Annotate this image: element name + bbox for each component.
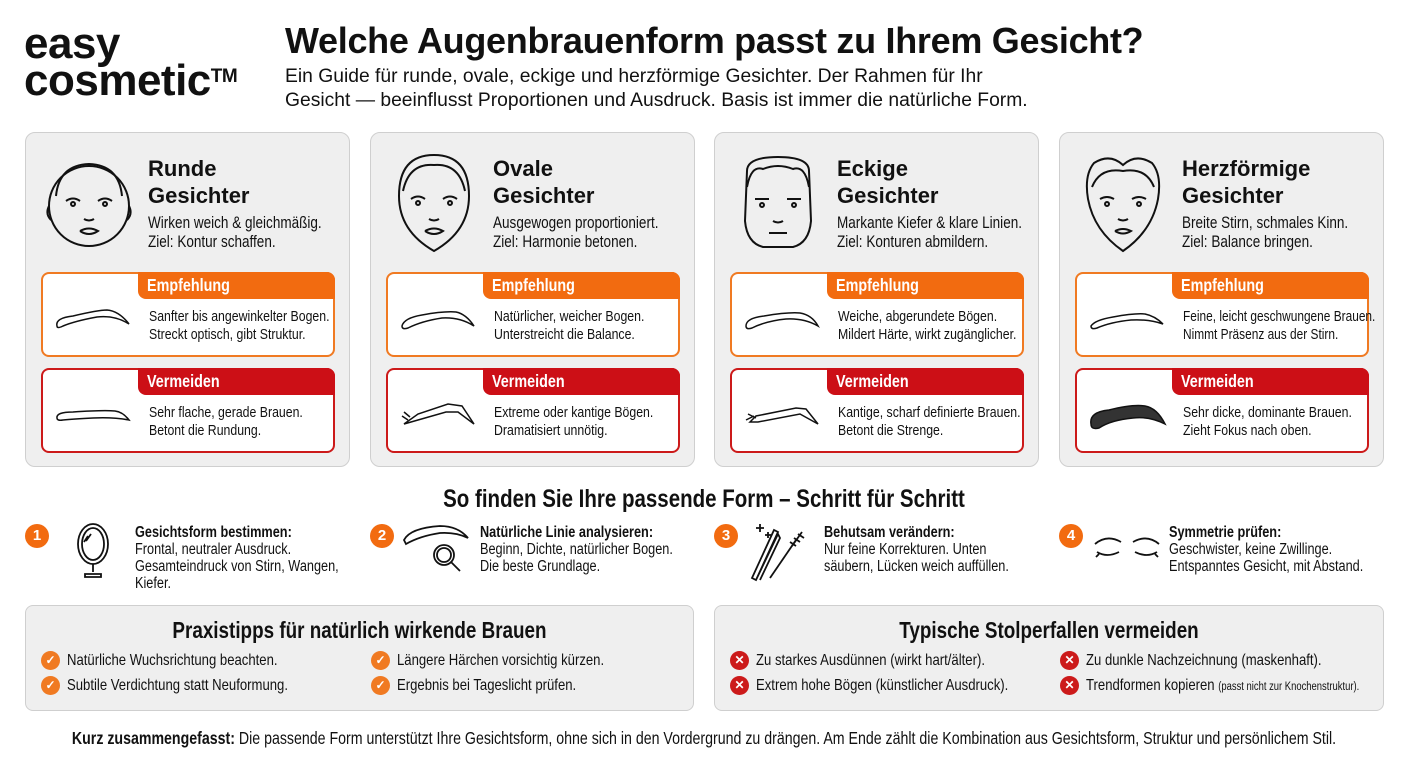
avoid: Vermeiden (147, 371, 220, 391)
heading: Gesichter (1182, 183, 1284, 208)
panel: Praxistipps: Praxistipps für natürlich wirkende Brauen (172, 617, 547, 643)
subtitle (285, 66, 1028, 111)
heading: Runde (148, 156, 216, 181)
panel: Praxistipps: ✓ (375, 653, 386, 667)
recommendation: Empfehlung (836, 275, 919, 295)
icon: brow with magnifier (403, 525, 469, 572)
panel: Ovale Gesichter (370, 132, 695, 467)
step 1: 1 (33, 527, 41, 544)
avoid: Betont die Strenge. (838, 422, 943, 439)
recommendation (1075, 272, 1369, 357)
heading (1182, 156, 1310, 208)
logo: cosmeticTM (24, 56, 237, 105)
step 1: Gesichtsform bestimmen: (135, 524, 292, 541)
description (493, 214, 658, 251)
avoid: Dramatisiert unnötig. (494, 422, 607, 439)
step 2: 2 (378, 527, 386, 544)
step 3: Nur feine Korrekturen. Unten (824, 541, 986, 558)
panel: Praxistipps: ✓ (45, 653, 56, 667)
panel: Praxistipps: Ergebnis bei Tageslicht prüfen. (397, 677, 576, 694)
avoid: Vermeiden (492, 371, 565, 391)
step 3: säubern, Lücken weich auffüllen. (824, 558, 1009, 575)
heading (493, 156, 594, 208)
description (837, 214, 1022, 251)
description: Wirken weich & gleichmäßig. (148, 214, 322, 232)
step 2: Natürliche Linie analysieren: (480, 524, 653, 541)
recommendation: Nimmt Präsenz aus der Stirn. (1183, 327, 1338, 343)
step 2: Die beste Grundlage. (480, 558, 600, 575)
avoid: Sehr flache, gerade Brauen. (149, 404, 303, 421)
avoid (730, 368, 1024, 453)
icon: round face (46, 163, 132, 247)
description: Ziel: Balance bringen. (1182, 233, 1313, 251)
recommendation: Empfehlung (147, 275, 230, 295)
avoid: Zieht Fokus nach oben. (1183, 422, 1312, 439)
avoid (386, 368, 680, 453)
description: Breite Stirn, schmales Kinn. (1182, 214, 1348, 232)
panel: Stolperfallen: ✕ (1064, 678, 1075, 692)
heading: Gesichter (493, 183, 594, 208)
pitfall items (730, 651, 985, 670)
step 4: Geschwister, keine Zwillinge. (1169, 541, 1332, 558)
heading: Eckige (837, 156, 908, 181)
panel: Praxistipps: Längere Härchen vorsichtig kürzen. (397, 652, 604, 669)
panel: Praxistipps (25, 605, 694, 711)
description: Ziel: Harmonie betonen. (493, 233, 637, 251)
description: Markante Kiefer & klare Linien. (837, 214, 1022, 232)
step 4: Entspanntes Gesicht, mit Abstand. (1169, 558, 1363, 575)
title: Welche Augenbrauenform passt zu Ihrem Gesicht? (285, 20, 1143, 61)
description (1182, 214, 1348, 251)
icon: tweezers and spoolie (750, 524, 804, 582)
heading (148, 156, 250, 208)
subtitle: Gesicht — beeinflusst Proportionen und Ausdruck. Basis ist immer die natürliche Form. (285, 90, 1028, 111)
step 1: Frontal, neutraler Ausdruck. (135, 541, 291, 558)
panel: Stolperfallen: Extrem hohe Bögen (künstlicher Ausdruck). (756, 677, 1008, 694)
icon: symmetric eyes (1094, 538, 1160, 558)
icon: mirror (77, 523, 109, 578)
recommendation: Feine, leicht geschwungene Brauen. (1183, 309, 1375, 325)
recommendation: Natürlicher, weicher Bogen. (494, 308, 644, 325)
recommendation: Streckt optisch, gibt Struktur. (149, 326, 306, 343)
recommendation: Mildert Härte, wirkt zugänglicher. (838, 326, 1016, 343)
heading: Gesichter (148, 183, 250, 208)
avoid: Betont die Rundung. (149, 422, 261, 439)
step 2 (370, 524, 673, 575)
panel: Praxistipps: Subtile Verdichtung statt Neuformung. (67, 677, 288, 694)
recommendation (41, 272, 335, 357)
icon: heart face (1086, 157, 1160, 252)
panel: Stolperfallen: Typische Stolperfallen vermeiden (899, 617, 1199, 643)
recommendation: Unterstreicht die Balance. (494, 326, 635, 343)
panel: Praxistipps: Natürliche Wuchsrichtung beachten. (67, 652, 278, 669)
step 3 (714, 524, 1009, 582)
step 1 (25, 523, 339, 592)
avoid: Vermeiden (1181, 371, 1254, 391)
panel: Stolperfallen: ✕ (1064, 653, 1075, 667)
avoid (41, 368, 335, 453)
footer summary: Kurz zusammengefasst: Die passende Form unterstützt Ihre Gesichtsform, ohne sich in den Vordergrund zu drängen. Am Ende zählt die Kombination aus Gesichtsform, Struktur und persönlichem Stil. (72, 728, 1336, 748)
panel: Herzförmige Gesichter (1059, 132, 1384, 467)
heading: Gesichter (837, 183, 938, 208)
icon: square face (744, 156, 812, 248)
step 1: Gesamteindruck von Stirn, Wangen, (135, 558, 339, 575)
avoid: Vermeiden (836, 371, 909, 391)
step 3: 3 (722, 527, 730, 544)
panel: Runde Gesichter (25, 132, 350, 467)
steps heading: So finden Sie Ihre passende Form – Schritt für Schritt (443, 485, 965, 513)
panel: Stolperfallen: Trendformen kopieren (passt nicht zur Knochenstruktur). (1086, 677, 1359, 694)
logo: easy (24, 19, 120, 68)
logo (24, 19, 237, 105)
recommendation: Sanfter bis angewinkelter Bogen. (149, 308, 330, 325)
description (148, 214, 322, 251)
panel: Praxistipps: ✓ (45, 678, 56, 692)
step 4 (1059, 524, 1363, 575)
recommendation: Empfehlung (492, 275, 575, 295)
subtitle: Ein Guide für runde, ovale, eckige und herzförmige Gesichter. Der Rahmen für Ihr (285, 66, 983, 87)
heading: Ovale (493, 156, 553, 181)
recommendation: Weiche, abgerundete Bögen. (838, 308, 997, 325)
step 2: Beginn, Dichte, natürlicher Bogen. (480, 541, 673, 558)
heading (837, 156, 938, 208)
avoid: Kantige, scharf definierte Brauen. (838, 404, 1021, 421)
panel: Stolperfallen (714, 605, 1384, 711)
panel: Eckige Gesichter (714, 132, 1039, 467)
recommendation (730, 272, 1024, 357)
avoid: Extreme oder kantige Bögen. (494, 404, 653, 421)
step 4: 4 (1067, 527, 1075, 544)
panel: Stolperfallen: ✕ (734, 678, 745, 692)
step 3: Behutsam verändern: (824, 524, 955, 541)
description: Ziel: Kontur schaffen. (148, 233, 276, 251)
recommendation: Empfehlung (1181, 275, 1264, 295)
panel: Stolperfallen: ✕ (734, 653, 745, 667)
recommendation (386, 272, 680, 357)
tip items (41, 651, 278, 670)
description: Ausgewogen proportioniert. (493, 214, 658, 232)
avoid (1075, 368, 1369, 453)
panel: Praxistipps: ✓ (375, 678, 386, 692)
step 1: Kiefer. (135, 575, 171, 592)
avoid: Sehr dicke, dominante Brauen. (1183, 404, 1352, 421)
step 4: Symmetrie prüfen: (1169, 524, 1281, 541)
panel: Stolperfallen: Zu starkes Ausdünnen (wirkt hart/älter). (756, 652, 985, 669)
panel: Stolperfallen: Zu dunkle Nachzeichnung (maskenhaft). (1086, 652, 1322, 669)
heading: Herzförmige (1182, 156, 1310, 181)
icon: oval face (398, 154, 470, 252)
description: Ziel: Konturen abmildern. (837, 233, 988, 251)
